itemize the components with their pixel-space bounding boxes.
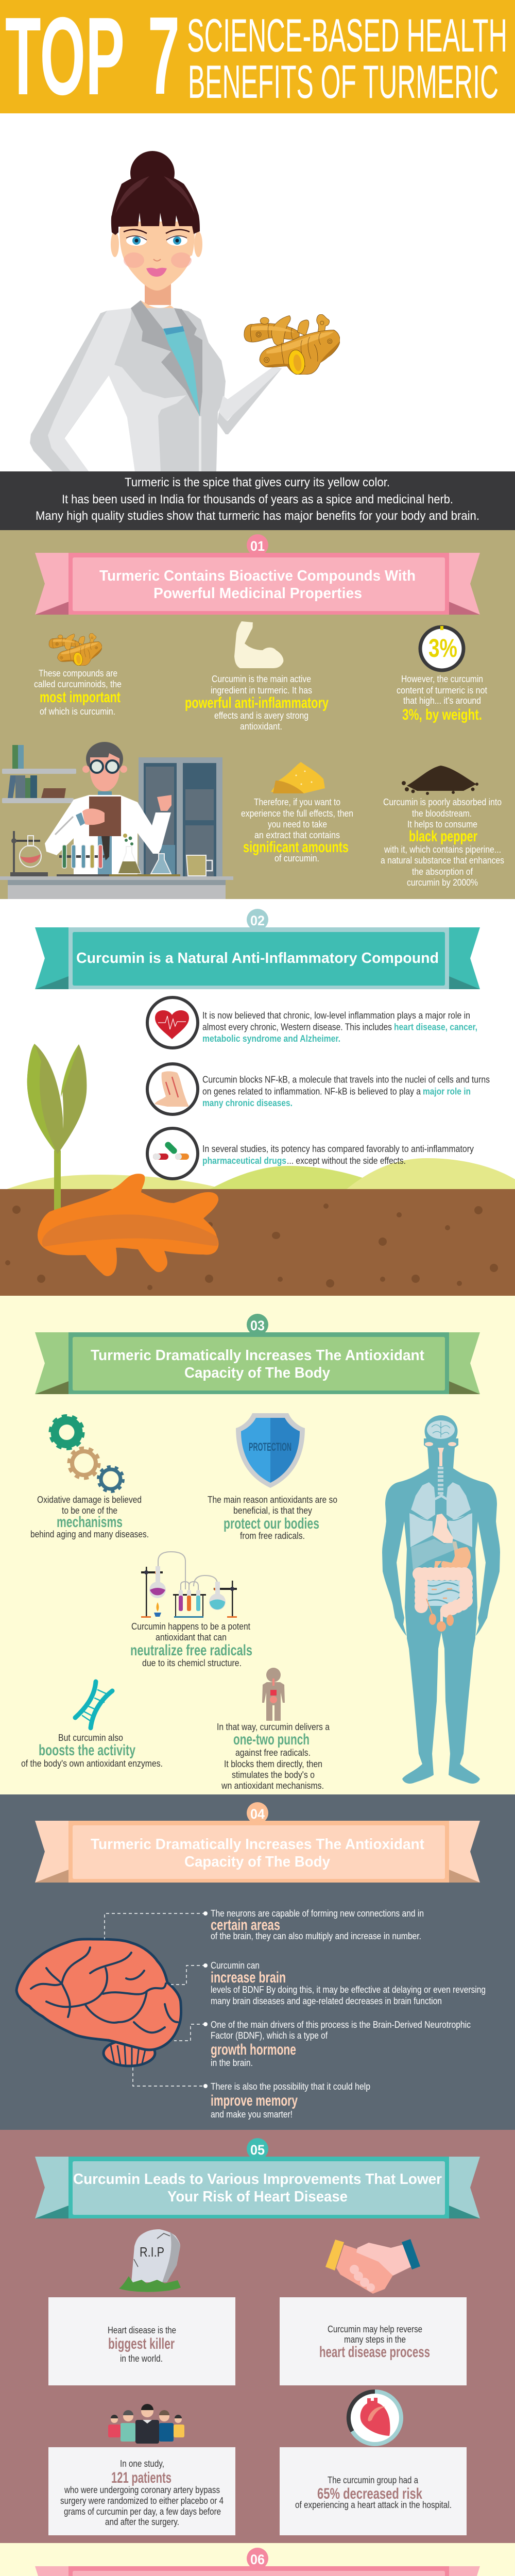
icon: protection shield: PROTECTION: [249, 1440, 291, 1453]
icon: flexed arm: [234, 621, 283, 668]
card: 65 percent decreased risk: [280, 2447, 467, 2535]
text: curcumin active ingredient: [185, 674, 329, 732]
text: curcumin active ingredient: antioxidant.: [240, 721, 282, 732]
icon: child anatomy: [262, 1668, 285, 1721]
text: significant amounts: of curcumin.: [274, 853, 319, 863]
ribbon heading 05: Curcumin Leads to Various Improvements That Lower: [73, 2171, 442, 2188]
ribbon heading 03: Capacity of The Body: [184, 1365, 330, 1381]
card: 121 patients: surgery were randomized to either placebo or 4: [60, 2496, 224, 2506]
card: 65 percent decreased risk: of experiencing a heart attack in the hospital.: [295, 2500, 452, 2510]
text: chronic inflammation: metabolic syndrome and Alzheimer.: [202, 1033, 340, 1044]
text: certain areas: certain areas: [211, 1917, 280, 1934]
badge 04: 04: [250, 1806, 265, 1822]
text: growth hormone: [211, 2020, 471, 2068]
illustration: sprout: [27, 1044, 87, 1212]
text: pharmaceutical drugs: [202, 1144, 474, 1166]
panel: 03 antioxidant capacity: [0, 1296, 515, 1794]
text: protect our bodies: [208, 1495, 337, 1541]
text: boosts the activity: But curcumin also: [58, 1733, 123, 1743]
card: biggest killer: [48, 2297, 235, 2385]
text: black pepper: Curcumin is poorly absorbed into: [383, 797, 502, 807]
card: biggest killer: biggest killer: [108, 2335, 175, 2352]
text: oxidative damage: behind aging and many diseases.: [30, 1529, 149, 1539]
text: curcuminoids: most important: [40, 689, 121, 706]
text: pharmaceutical drugs: ... except without the side effects.: [287, 1156, 406, 1166]
badge 03: [247, 1314, 268, 1335]
text: one-two punch: stimulates the body's o: [232, 1770, 315, 1780]
badge 05: 05: [250, 2142, 265, 2158]
text: improve memory: improve memory: [211, 2092, 298, 2109]
text: black pepper: the absorption of: [412, 867, 473, 877]
icon: gravestone RIP: [119, 2229, 181, 2292]
text: one-two punch: [217, 1722, 330, 1791]
text: neutralize free radicals: antioxidant that can: [156, 1632, 227, 1642]
illustration: human body with organs: [382, 1415, 500, 1784]
text: curcuminoids: called curcuminoids, the: [34, 679, 122, 689]
badge 02: [247, 909, 268, 930]
text: oxidative damage: mechanisms: [57, 1514, 123, 1531]
ribbon heading 05: Your Risk of Heart Disease: [167, 2189, 348, 2205]
text: neutralize free radicals: Curcumin happens to be a potent: [131, 1621, 250, 1632]
text: black pepper: with it, which contains piperine...: [384, 844, 501, 855]
badge 02: 02: [250, 913, 265, 928]
icon: turmeric root: [49, 633, 102, 666]
text: curcuminoids: These compounds are: [39, 668, 117, 679]
icon: protection shield: [236, 1413, 305, 1488]
text: NF-kB: [202, 1075, 490, 1108]
icon: black pepper pile: [402, 766, 478, 795]
text: oxidative damage: to be one of the: [62, 1505, 117, 1516]
text: 3 percent by weight: [397, 674, 487, 723]
text: NF-kB: major role in: [423, 1086, 471, 1096]
icon: skin inflammation back: [147, 1064, 198, 1114]
icon: DNA helix: [75, 1682, 112, 1728]
badge 06: [247, 2548, 268, 2569]
icon: anatomical heart in ring: [349, 2392, 401, 2444]
text: one-two punch: one-two punch: [233, 1731, 310, 1748]
text: one-two punch: It blocks them directly, then: [224, 1759, 322, 1769]
text: increase brain: increase brain: [211, 1969, 286, 1986]
ribbon heading 05: [35, 2157, 480, 2218]
badge 04: [247, 1802, 268, 1824]
text: chronic inflammation: almost every chronic, Western disease. This includes: [202, 1022, 392, 1032]
text: black pepper: [381, 797, 504, 888]
panel: 06 alzheimer's: [0, 2543, 515, 2576]
card: biggest killer: Heart disease is the: [108, 2325, 176, 2335]
text: protect our bodies: protect our bodies: [224, 1515, 319, 1532]
ribbon heading 03: [35, 1332, 480, 1394]
ribbon heading 01: Turmeric Contains Bioactive Compounds With: [99, 568, 416, 584]
text: significant amounts: an extract that contains: [254, 830, 340, 840]
intro text band: Many high quality studies show that turmeric has major benefits for your body and brain.: [36, 509, 479, 523]
text: NF-kB: on genes related to inflammation. NF-kB is believed to play a: [202, 1086, 421, 1096]
text: curcumin active ingredient: ingredient in turmeric. It has: [211, 685, 312, 696]
text: significant amounts: you need to take: [268, 819, 327, 829]
card: heart disease process: [280, 2297, 467, 2385]
card: heart disease process: Curcumin may help reverse: [328, 2324, 422, 2334]
text: significant amounts: [241, 797, 353, 863]
text: one-two punch: In that way, curcumin delivers a: [217, 1722, 330, 1732]
illustration: brain: [16, 1939, 181, 2066]
text: curcumin active ingredient: effects and is avery strong: [214, 710, 308, 721]
ribbon heading 03: Turmeric Dramatically Increases The Antioxidant: [91, 1347, 424, 1364]
text: increase brain: [211, 1960, 486, 2006]
ribbon heading 04: Capacity of The Body: [184, 1854, 330, 1870]
text: certain areas: [211, 1908, 424, 1941]
panel: 01 bioactive compounds: [0, 530, 515, 899]
icon: heart in ring: [147, 997, 198, 1048]
badge 05: [247, 2138, 268, 2160]
intro text band: It has been used in India for thousands of years as a spice and medicinal herb.: [62, 493, 453, 506]
text: black pepper: black pepper: [409, 828, 477, 845]
icon: gravestone RIP: R.I.P: [140, 2244, 164, 2260]
text: 3 percent by weight: However, the curcumin: [401, 674, 483, 684]
text: significant amounts: Therefore, if you want to: [254, 797, 340, 807]
ribbon heading 02: [35, 927, 480, 989]
card: 65 percent decreased risk: The curcumin group had a: [328, 2475, 419, 2485]
intro text band: [0, 471, 515, 530]
icon: gears: [50, 1416, 123, 1492]
ribbon heading 01: [35, 553, 480, 615]
badge 03: 03: [250, 1318, 265, 1333]
ribbon heading 06: [35, 2566, 480, 2576]
text: neutralize free radicals: due to its chemicl structure.: [142, 1658, 242, 1668]
text: significant amounts: experience the full effects, then: [241, 808, 353, 819]
text: neutralize free radicals: [130, 1621, 252, 1668]
text: chronic inflammation: [202, 1010, 477, 1044]
text: improve memory: There is also the possibility that it could help: [211, 2081, 370, 2092]
text: increase brain: many brain diseases and age-related decreases in brain function: [211, 1996, 442, 2006]
hills background: [7, 1158, 515, 1189]
text: black pepper: the bloodstream.: [412, 808, 472, 819]
text: 3 percent by weight: 3%, by weight.: [402, 706, 482, 723]
text: oxidative damage: [30, 1495, 149, 1539]
text: growth hormone: in the brain.: [211, 2058, 253, 2068]
text: NF-kB: many chronic diseases.: [202, 1098, 293, 1108]
text: protect our bodies: beneficial, is that they: [233, 1505, 312, 1516]
card: 121 patients: grams of curcumin per day, a few days before: [64, 2506, 221, 2517]
text: one-two punch: wn antioxidant mechanisms.: [221, 1781, 324, 1791]
card: biggest killer: in the world.: [120, 2353, 163, 2364]
card: 121 patients: and after the surgery.: [105, 2517, 179, 2527]
intro text band: Turmeric is the spice that gives curry its yellow color.: [125, 476, 390, 489]
card: heart disease process: heart disease process: [319, 2344, 430, 2361]
icon: chemistry apparatus: [141, 1552, 237, 1618]
text: curcuminoids: [34, 668, 122, 717]
text: improve memory: [211, 2081, 370, 2120]
soil ground: [0, 1189, 515, 1296]
header title band: [0, 0, 515, 118]
text: boosts the activity: of the body's own antioxidant enzymes.: [21, 1758, 163, 1769]
icon: turmeric powder: [271, 762, 325, 793]
text: neutralize free radicals: neutralize free radicals: [130, 1642, 252, 1659]
text: increase brain: Curcumin can: [211, 1960, 260, 1971]
badge 01: [247, 534, 268, 556]
badge 06: 06: [250, 2552, 265, 2567]
text: chronic inflammation: heart disease, cancer,: [394, 1022, 477, 1032]
text: chronic inflammation: It is now believed that chronic, low-level inflammation plays a major role in: [202, 1010, 470, 1021]
text: boosts the activity: boosts the activity: [39, 1742, 135, 1759]
card: 65 percent decreased risk: 65% decreased risk: [317, 2485, 422, 2502]
text: certain areas: of the brain, they can also multiply and increase in number.: [211, 1931, 421, 1941]
text: one-two punch: against free radicals.: [235, 1748, 311, 1758]
ribbon heading 01: Powerful Medicinal Properties: [153, 585, 362, 602]
icon: group of people: [108, 2404, 184, 2444]
illustration: woman in lab coat holding turmeric: [30, 151, 340, 471]
text: curcuminoids: of which is curcumin.: [40, 706, 115, 717]
ribbon heading 04: [35, 1821, 480, 1883]
card: 121 patients: [48, 2447, 235, 2535]
icon: handshake: [325, 2239, 420, 2294]
panel: 05 heart disease: [0, 2130, 515, 2543]
text: black pepper: curcumin by 2000%: [407, 877, 478, 888]
text: growth hormone: growth hormone: [211, 2041, 296, 2058]
card: 121 patients: who were undergoing coronary artery bypass: [64, 2485, 220, 2495]
text: significant amounts: significant amounts: [243, 839, 349, 856]
text: protect our bodies: The main reason antioxidants are so: [208, 1495, 337, 1505]
icon: pills: [147, 1128, 198, 1179]
text: growth hormone: Factor (BDNF), which is a type of: [211, 2030, 328, 2041]
text: pharmaceutical drugs: In several studies, its potency has compared favorably to anti-inflammatory: [202, 1144, 474, 1154]
text: 3 percent by weight: content of turmeric is not: [397, 685, 487, 696]
icon: 3 percent ring: [420, 626, 464, 670]
text: curcumin active ingredient: powerful anti-inflammatory: [185, 694, 329, 711]
text: growth hormone: One of the main drivers of this process is the Brain-Derived Neurotrophic: [211, 2020, 471, 2030]
card: 121 patients: 121 patients: [111, 2469, 171, 2486]
ribbon heading 02: Curcumin is a Natural Anti-Inflammatory Compound: [76, 950, 439, 967]
text: certain areas: The neurons are capable of forming new connections and in: [211, 1908, 424, 1919]
ribbon heading 04: Turmeric Dramatically Increases The Antioxidant: [91, 1836, 424, 1853]
text: improve memory: and make you smarter!: [211, 2109, 293, 2120]
text: pharmaceutical drugs: pharmaceutical drugs: [202, 1156, 286, 1166]
text: 3 percent by weight: that high... it's around: [403, 696, 481, 706]
text: oxidative damage: Oxidative damage is believed: [37, 1495, 142, 1505]
illustration: scientist in lab: [0, 742, 233, 899]
text: boosts the activity: [21, 1733, 163, 1769]
badge 01: 01: [250, 538, 265, 554]
panel: 02 anti-inflammatory compound: [0, 899, 515, 1296]
card: heart disease process: many steps in the: [344, 2334, 406, 2345]
text: curcumin active ingredient: Curcumin is the main active: [212, 674, 311, 684]
card: 121 patients: In one study,: [120, 2459, 164, 2469]
text: protect our bodies: from free radicals.: [240, 1531, 305, 1541]
connectors: brain callouts: [105, 1911, 208, 2088]
panel: 04 brain: [0, 1794, 515, 2130]
icon: 3 percent ring: 3%: [428, 634, 457, 663]
illustration: orange turmeric root: [38, 1174, 218, 1276]
text: black pepper: It helps to consume: [407, 819, 477, 829]
